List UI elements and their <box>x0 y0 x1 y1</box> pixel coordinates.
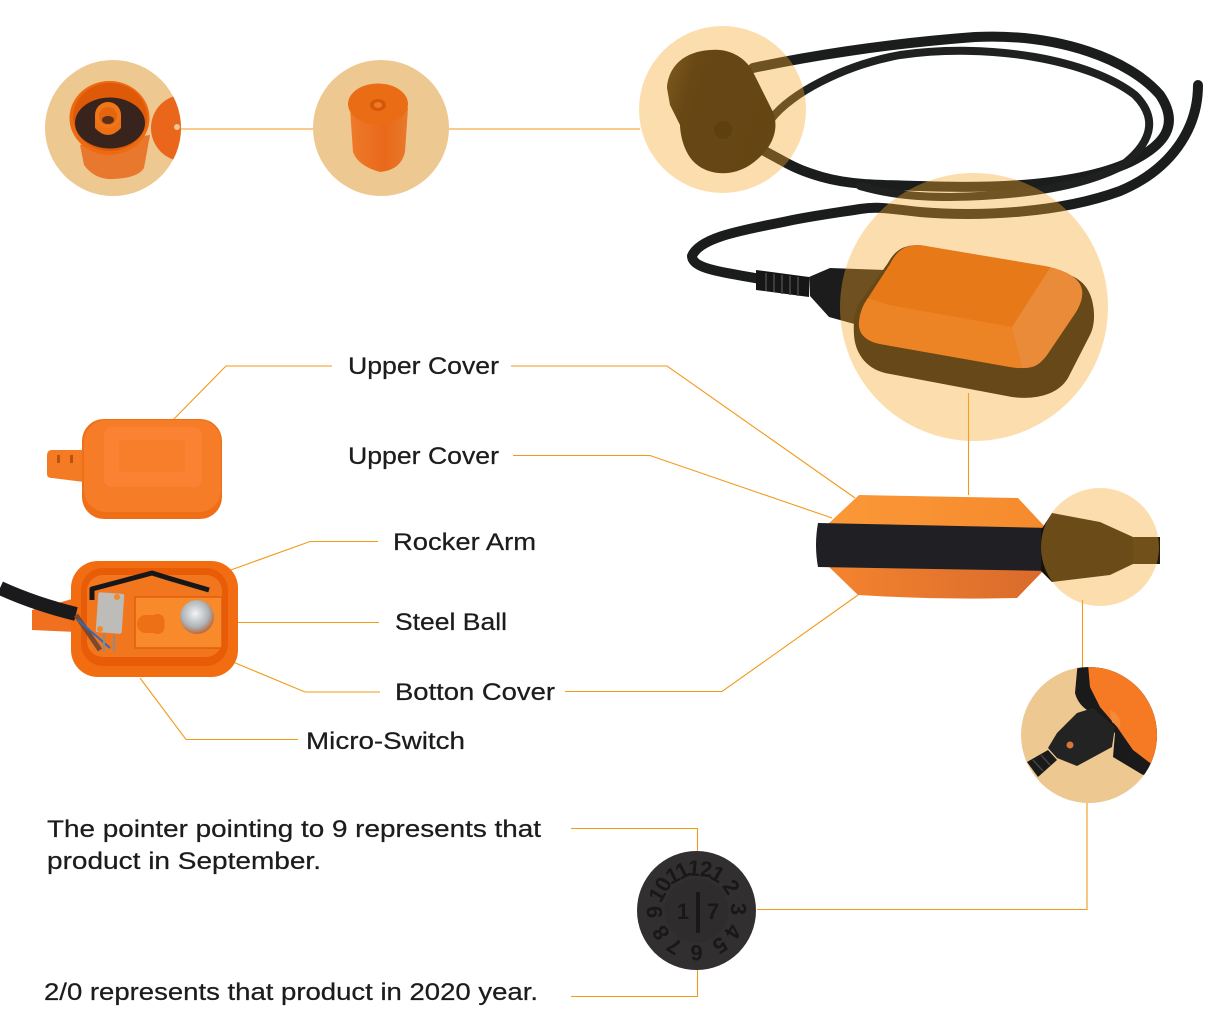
note: year digits: 2/0 represents that product in 2020 year. <box>44 979 538 1006</box>
photo: float side view <box>816 495 1050 599</box>
photo: open float can with pellets <box>45 60 181 196</box>
date stamp disc: 2 <box>718 875 745 899</box>
label: Upper Cover: Upper Cover <box>348 353 499 380</box>
photo: side view connector with overlay circle <box>1041 488 1160 606</box>
photo: black cable loops <box>692 37 1198 279</box>
date stamp disc <box>637 851 756 970</box>
note: month pointer <box>47 816 541 875</box>
date stamp disc: 7 <box>707 899 719 924</box>
label: Botton Cover: Botton Cover <box>395 679 555 706</box>
date stamp disc: 7 <box>662 932 686 960</box>
connector lines <box>140 129 1087 996</box>
date stamp disc: 4 <box>719 920 747 944</box>
date stamp disc: 1 <box>706 860 729 888</box>
date stamp disc: 5 <box>708 932 732 959</box>
photo: open bottom cover with components <box>0 561 238 677</box>
date stamp disc: 12 <box>687 855 713 882</box>
date stamp disc: 8 <box>647 921 675 945</box>
date stamp disc: 3 <box>726 902 751 916</box>
photo: upper cover <box>47 419 222 519</box>
label: Upper Cover (second): Upper Cover <box>348 443 499 470</box>
label: Micro-Switch: Micro-Switch <box>306 728 465 755</box>
photo: float 1 cylinder with overlay circle <box>639 26 806 193</box>
label: Steel Ball: Steel Ball <box>395 609 507 636</box>
date stamp disc: 9 <box>642 905 667 919</box>
photo: connector close-up <box>1021 667 1157 803</box>
date stamp disc: 11 <box>661 857 693 889</box>
date stamp disc: 10 <box>643 873 677 906</box>
note: month pointer: The pointer pointing to 9 represents that <box>47 816 541 843</box>
date stamp disc: 6 <box>690 940 703 965</box>
photo: lead float top view with overlay circle <box>756 173 1108 441</box>
note: month pointer: product in September. <box>47 848 321 875</box>
label: Rocker Arm: Rocker Arm <box>393 529 536 556</box>
date stamp disc: 1 <box>677 899 689 924</box>
photo: closed float can <box>313 60 449 196</box>
